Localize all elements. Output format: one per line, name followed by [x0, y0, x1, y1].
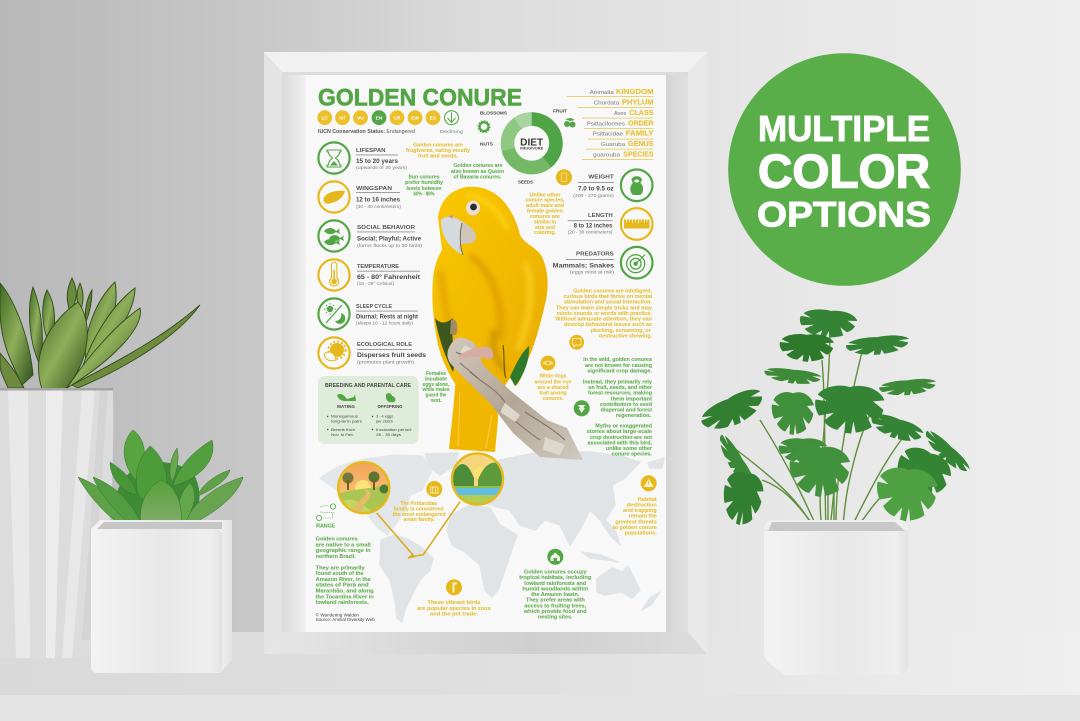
stat: weight: WEIGHT: [588, 174, 614, 180]
left vase with agave plant: [0, 278, 200, 659]
text: similar male and female: adult male and: [526, 203, 564, 209]
text: queen of bavaria: Golden conures are: [454, 163, 503, 169]
text: south of the amazon: lowland rainforests.: [316, 600, 369, 606]
declining arrow icon: [444, 111, 458, 125]
text: intelligent birds: Golden conures are intelligent,: [573, 288, 653, 294]
panel: breeding and parental care: Monogamous: [331, 414, 358, 419]
IUCN status badges: EW: [411, 116, 419, 122]
text: psittacidae family: the most endangered: [392, 512, 446, 518]
icon: chat bubble: [569, 335, 584, 350]
text: similar male and female: Unlike other: [530, 192, 560, 198]
stat: wingspan: (30 - 40 centimeters): [356, 204, 401, 209]
conservation status text: IUCN Conservation Status: Endangered: [318, 129, 415, 135]
taxonomy list: Guaruba: [601, 142, 625, 148]
text: intelligent birds: mimic sounds or words with practice.: [557, 311, 653, 317]
stat: wingspan: WINGSPAN: [356, 186, 392, 192]
panel: breeding and parental care: OFFSPRING: [378, 404, 402, 409]
text: females incubate: [422, 371, 450, 404]
icon: offspring eggs: [386, 393, 395, 402]
IUCN status badges: EN: [376, 116, 383, 122]
text: intelligent birds: destructive chewing.: [599, 334, 653, 340]
icon: mating birds: [337, 394, 356, 401]
wing dark feathers: [435, 318, 454, 372]
text: myths: associated with this bird,: [588, 440, 653, 446]
panel: breeding and parental care: Nov. to Feb.: [331, 432, 354, 437]
text: south of the amazon: states of Pará and: [316, 583, 369, 589]
text: threats: to golden conure: [613, 525, 657, 531]
text: sun conures humidity: [405, 175, 443, 198]
taxonomy list: guarouba: [593, 152, 620, 158]
stat: social behavior: (forms flocks up to 30 birds): [357, 243, 423, 248]
text: crop damage in the wild: are not known for causing: [585, 363, 652, 369]
stat: ecological role: (promotes plant growth): [357, 360, 415, 365]
stat: temperature: 65 - 80° Fahrenheit: [357, 273, 421, 281]
text: vibrant birds: and the pet trade.: [430, 612, 479, 618]
stat: temperature: TEMPERATURE: [357, 264, 399, 270]
text: sun conures humidity: Sun conures: [408, 175, 440, 181]
panel: breeding and parental care: Breeds from: [331, 427, 355, 432]
stat: temperature: [318, 259, 421, 291]
text: frugivores: frugivores, eating mostly: [406, 148, 470, 154]
text: fruit and forest resources: contributors to seed: [600, 402, 652, 408]
range map icon and label: RANGE: [316, 523, 336, 529]
taxonomy list: PHYLUM: [622, 97, 654, 106]
text: vibrant birds: These vibrant birds: [428, 600, 481, 606]
taxonomy list: [567, 87, 654, 160]
text: south of the amazon: Amazon River, in the: [316, 577, 371, 583]
credits: © Wandering Walden: [316, 612, 360, 617]
text: threats: Habitat: [638, 497, 657, 503]
text: similar male and female: conure species,: [526, 198, 565, 204]
foot: [458, 347, 493, 360]
text: similar male and female: coloring.: [534, 230, 557, 236]
stat: predators: (eggs most at risk): [570, 270, 615, 275]
illustration: river habitat: [450, 452, 506, 506]
text: similar male and female: [526, 192, 565, 236]
text: intelligent birds: stimulation and social interaction.: [564, 300, 653, 306]
taxonomy list: FAMILY: [626, 129, 654, 138]
text: threats: populations.: [625, 531, 657, 537]
text: habitat: Golden conures occupy: [524, 569, 587, 575]
taxonomy list: Chordata: [594, 100, 619, 106]
text: habitat: which provide food and: [523, 609, 587, 615]
credits: [316, 612, 375, 622]
text: fruit and forest resources: regeneration.: [616, 413, 652, 419]
text: queen of bavaria: of Bavaria conures.: [454, 175, 502, 181]
text: south of the amazon: the Tocantins River in: [316, 594, 374, 600]
diet labels: SEEDS: [518, 180, 533, 185]
stat: social behavior: Social; Playful; Active: [357, 236, 421, 242]
text: myths: Myths or exaggerated: [595, 424, 652, 430]
stat: social behavior: [318, 220, 423, 252]
body: [432, 187, 548, 402]
text: similar male and female: similar in: [534, 219, 556, 225]
text: habitat: lowland rainforests and: [524, 581, 586, 587]
callout: multiple color options: [728, 53, 961, 286]
beak: [441, 216, 476, 255]
IUCN status badges: VU: [357, 116, 364, 122]
range map icon and label: [316, 504, 336, 529]
text: intelligent birds: They can learn simple tricks and may: [556, 305, 652, 311]
stat: predators: PREDATORS: [576, 252, 614, 258]
IUCN status badges: CR: [394, 116, 401, 122]
taxonomy list: GENUS: [628, 139, 654, 148]
stat: length: [568, 208, 652, 240]
agave leaves: [0, 278, 200, 389]
taxonomy list: Animalia: [590, 90, 614, 96]
stat: ecological role: [318, 337, 426, 369]
callout: multiple color options: COLOR: [758, 144, 930, 198]
text: females incubate: while males: [422, 387, 450, 393]
text: white rings: around the eye: [534, 379, 572, 385]
text: similar male and female: conures are: [530, 214, 560, 220]
text: queen of bavaria: [451, 163, 504, 181]
text: habitat: They prefer areas with: [526, 598, 585, 604]
IUCN status badges: [317, 110, 440, 125]
text: intelligent birds: curious birds that thrive on mental: [563, 294, 653, 300]
text: myths: crop destruction are not: [590, 435, 652, 441]
icon: yellow note badge: [556, 169, 572, 185]
eye: [466, 201, 480, 215]
stat: ecological role: Disperses fruit seeds: [357, 352, 426, 359]
text: native range: [316, 537, 371, 560]
text: females incubate: eggs alone,: [422, 382, 450, 388]
text: white rings: conures.: [542, 396, 564, 402]
text: fruit and forest resources: dispersal and forest: [601, 408, 652, 414]
text: south of the amazon: Maranhão, and along: [316, 588, 374, 594]
text: intelligent birds: Without adequate attention, they can: [555, 317, 652, 323]
text: threats: destruction: [627, 503, 657, 509]
taxonomy list: ORDER: [628, 118, 654, 127]
text: crop damage in the wild: In the wild, golden conures: [583, 357, 652, 363]
text: frugivores: fruit and seeds.: [418, 154, 459, 160]
text: myths: conure species.: [612, 452, 653, 458]
text: white rings: White rings: [540, 374, 567, 380]
text: psittacidae family: family is considered: [394, 507, 444, 513]
text: psittacidae family: avian family.: [404, 517, 435, 523]
right pot with monstera: [697, 308, 973, 675]
panel: breeding and parental care: 3 - 4 eggs: [376, 414, 393, 419]
taxonomy list: Psittaciformes: [587, 121, 625, 127]
illustration: forest landscape: [337, 461, 390, 514]
diet labels: NUTS: [480, 142, 493, 147]
text: habitat: [519, 569, 591, 621]
text: intelligent birds: plucking, screaming, or: [591, 328, 651, 334]
text: intelligent birds: [555, 288, 653, 340]
stat: temperature: (18 - 28° Celsius): [357, 281, 394, 286]
stat: ecological role: ECOLOGICAL ROLE: [357, 342, 412, 348]
diet labels: FRUIT: [553, 109, 568, 114]
stat: sleep cycle: [318, 298, 419, 330]
text: south of the amazon: [316, 565, 374, 606]
text: females incubate: Females: [426, 371, 446, 377]
icon: fruit: [564, 118, 576, 128]
credits: Source: Animal Diversity Web: [316, 617, 375, 622]
text: intelligent birds: develop behavioral issues such as: [564, 322, 652, 328]
text: females incubate: incubate: [425, 376, 447, 382]
text: queen of bavaria: also known as Queen: [451, 169, 504, 175]
text: native range: are native to a small: [316, 542, 371, 548]
stat: sleep cycle: Diurnal; Rests at night: [356, 314, 419, 320]
panel: breeding and parental care: Incubation period:: [376, 427, 412, 432]
icon: habitat home: [547, 549, 563, 565]
text: native range: northern Brazil.: [316, 554, 356, 560]
text: sun conures humidity: levels between: [406, 186, 442, 192]
callout: multiple color options: OPTIONS: [757, 196, 931, 234]
stat: weight: [573, 170, 652, 201]
text: fruit and forest resources: forest resources, making: [588, 391, 652, 397]
stat: weight: 7.0 to 9.5 oz: [578, 186, 614, 193]
donut chart: diet: [502, 112, 563, 174]
icon: blossom gear: [478, 121, 490, 132]
text: threats: remain the: [629, 514, 657, 520]
taxonomy list: KINGDOM: [616, 87, 654, 96]
text: south of the amazon: found south of the: [316, 571, 364, 577]
text: white rings: trait among: [540, 390, 566, 396]
panel: breeding and parental care: MATING: [337, 404, 355, 409]
stat: length: (20 - 30 centimeters): [568, 230, 613, 235]
text: crop damage in the wild: significant crop damage.: [587, 368, 653, 374]
panel: breeding and parental care: per clutch: [376, 419, 393, 424]
text: similar male and female: female golden: [527, 208, 563, 214]
text: native range: Golden conures: [316, 537, 358, 543]
stat: lifespan: LIFESPAN: [356, 148, 386, 154]
stat: predators: [553, 247, 652, 278]
text: psittacidae family: [392, 501, 446, 523]
text: myths: unlike some other: [606, 446, 652, 452]
text: habitat: nesting sites.: [538, 615, 573, 621]
text: frugivores: [406, 142, 470, 160]
text: vibrant birds: [417, 600, 491, 618]
stat: predators: Mammals; Snakes: [553, 262, 614, 269]
panel: breeding and parental care: long-term pairs: [331, 419, 362, 424]
monstera stems: [730, 330, 915, 530]
taxonomy list: Aves: [614, 111, 627, 117]
text: frugivores: Golden conures are: [413, 142, 463, 148]
stat: social behavior: SOCIAL BEHAVIOR: [357, 225, 415, 231]
tail: [449, 372, 498, 452]
stat: wingspan: 12 to 16 inches: [356, 197, 400, 204]
panel: breeding and parental care: [318, 376, 418, 444]
text: threats: [613, 497, 657, 537]
text: fruit and forest resources: [583, 379, 652, 419]
stat: sleep cycle: (sleeps 10 - 12 hours daily): [356, 320, 413, 326]
icon: psittacidae: [426, 481, 442, 497]
icon: pet trade: [446, 579, 462, 595]
text: habitat: access to fruiting trees,: [524, 603, 587, 609]
stat: lifespan: (upwards of 30 years): [356, 165, 408, 170]
text: native range: geographic range in: [316, 548, 371, 554]
panel: breeding and parental care: 26 - 30 days: [376, 432, 401, 437]
donut chart: diet: FRUGIVORE: [520, 146, 544, 150]
square planter: [764, 520, 908, 675]
text: fruit and forest resources: them important: [611, 396, 652, 402]
text: habitat: the Amazon basin.: [531, 592, 580, 598]
text: white rings: [534, 374, 572, 402]
golden conure bird on branch: [432, 187, 583, 460]
donut chart: diet: DIET: [520, 137, 543, 148]
IUCN status badges: NT: [339, 116, 346, 122]
diet labels: [480, 109, 568, 185]
IUCN status badges: LC: [321, 116, 328, 122]
text: sun conures humidity: prefer humidity: [405, 180, 443, 186]
infographic poster: [316, 84, 664, 622]
picture frame: [264, 52, 707, 654]
text: habitat: humid woodlands within: [522, 586, 588, 592]
title: GOLDEN CONURE: [318, 84, 522, 112]
stat: lifespan: [318, 142, 408, 174]
text: myths: stories about large-scale: [587, 429, 652, 435]
text: myths: [587, 424, 653, 458]
world map: [320, 452, 664, 622]
icon: eye: [541, 356, 555, 370]
text: females incubate: nest.: [430, 398, 442, 404]
text: white rings: are a shared: [538, 385, 568, 391]
stat: lifespan: 15 to 20 years: [356, 158, 398, 165]
stat: length: LENGTH: [588, 213, 613, 219]
range line callout: [377, 502, 460, 558]
diet labels: BLOSSOMS: [480, 111, 507, 116]
stat: weight: (200 - 270 grams): [573, 193, 614, 198]
IUCN status badges: EX: [430, 116, 437, 122]
stat: wingspan: [318, 181, 401, 213]
text: females incubate: guard the: [426, 393, 447, 399]
text: habitat: tropical habitats, including: [519, 575, 591, 581]
text: psittacidae family: The Psittacidae: [400, 501, 437, 507]
text: fruit and forest resources: on fruit, seeds, and other: [588, 385, 652, 391]
text: fruit and forest resources: Instead, they primarily rely: [583, 379, 652, 385]
taxonomy list: Psittacidae: [593, 132, 623, 138]
callout: multiple color options: MULTIPLE: [758, 108, 930, 149]
taxonomy list: CLASS: [629, 108, 654, 117]
monstera leaves: [697, 308, 973, 528]
feather shading: [440, 195, 530, 370]
branch: [447, 338, 583, 460]
text: similar male and female: size and: [535, 225, 555, 231]
text: crop damage in the wild: [583, 357, 653, 374]
text: vibrant birds: are popular species in zoos: [417, 606, 491, 612]
text: sun conures humidity: 60% - 80%: [414, 192, 435, 198]
stat: sleep cycle: SLEEP CYCLE: [356, 304, 392, 310]
icon: warning: [641, 475, 657, 491]
text: threats: and trapping: [623, 508, 657, 514]
icon: green seed arrow: [574, 400, 590, 416]
declining label: Declining: [440, 129, 464, 134]
taxonomy list: SPECIES: [623, 150, 654, 158]
panel: breeding and parental care: BREEDING AND PARENTAL CARE: [325, 383, 412, 389]
ribbed vase: [0, 388, 113, 659]
text: threats: greatest threats: [615, 519, 657, 525]
stat: length: 8 to 12 inches: [574, 223, 613, 230]
text: south of the amazon: They are primarily: [316, 565, 365, 571]
small square pot with succulent: [78, 430, 243, 673]
